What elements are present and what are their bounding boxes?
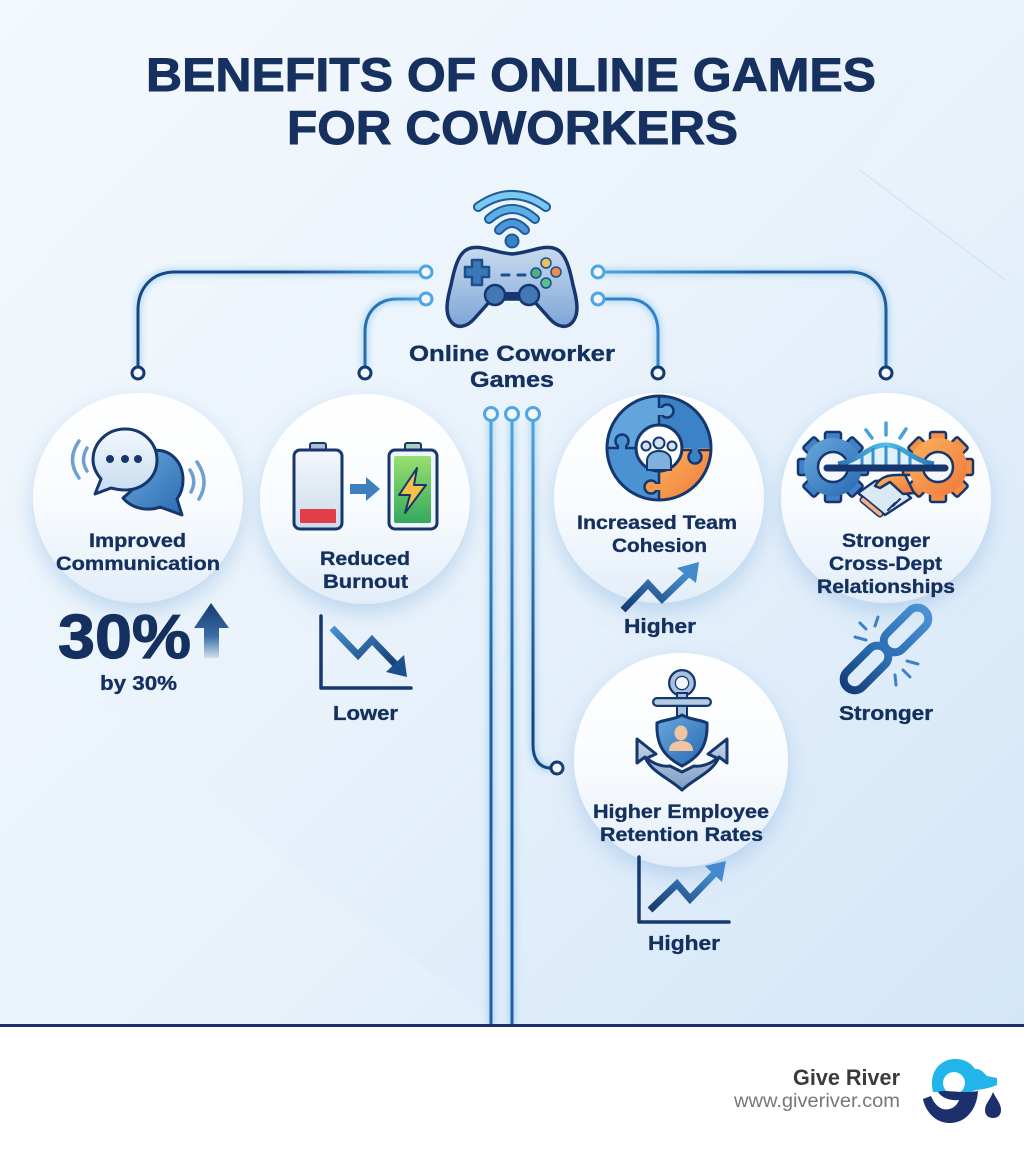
footer brand text: www.giveriver.com <box>733 1091 900 1112</box>
label <box>593 801 769 846</box>
circle background <box>33 393 243 603</box>
central label: Online Coworker <box>409 341 615 366</box>
panel: stronger cross-dept relationships <box>781 393 991 725</box>
footer brand text: Give River <box>793 1065 900 1090</box>
icon: speech bubbles <box>72 429 204 515</box>
title: BENEFITS OF ONLINE GAMES <box>146 48 876 101</box>
central label: Games <box>470 367 554 392</box>
label <box>817 530 955 598</box>
central label <box>409 341 615 392</box>
icon: anchor with shield <box>637 673 727 790</box>
label <box>320 548 410 593</box>
icon: gears bridge and handshake <box>798 423 973 515</box>
connector lines <box>138 272 886 1024</box>
chart: rising trend <box>639 857 729 922</box>
icon: puzzle ring with team <box>607 396 711 500</box>
panel: improved communication <box>33 393 243 695</box>
icon: game controller <box>447 247 577 326</box>
label: Communication <box>56 553 220 575</box>
icon: chain link <box>839 603 933 695</box>
connector nodes <box>132 266 892 774</box>
label: Retention Rates <box>600 824 763 846</box>
footer brand text <box>733 1065 900 1112</box>
label: Cohesion <box>612 535 707 557</box>
panel: higher employee retention rates <box>574 653 788 955</box>
stat: 30 percent: 30% <box>58 603 191 672</box>
circle background <box>554 393 764 603</box>
label: Relationships <box>817 576 955 598</box>
title: FOR COWORKERS <box>287 101 738 154</box>
value label: Lower <box>333 703 398 725</box>
title <box>146 48 876 154</box>
chart: rising trend <box>623 562 699 610</box>
label: Improved <box>89 530 186 552</box>
value label: Stronger <box>839 703 933 725</box>
label: Stronger <box>842 530 930 552</box>
icon: wifi signal <box>478 195 546 248</box>
circle background <box>781 393 991 603</box>
panel: reduced burnout <box>260 394 470 725</box>
label: Reduced <box>320 548 410 570</box>
circle background <box>574 653 788 867</box>
label <box>577 512 737 557</box>
value label: Higher <box>648 933 720 955</box>
stat note: by 30% <box>100 673 177 695</box>
value label: Higher <box>624 616 696 638</box>
icon: Give River logo <box>923 1059 1001 1123</box>
label <box>56 530 220 575</box>
footer band <box>0 1024 1024 1154</box>
label: Increased Team <box>577 512 737 534</box>
label: Burnout <box>323 571 409 593</box>
chart: falling trend <box>321 616 411 688</box>
circle background <box>260 394 470 604</box>
label: Cross-Dept <box>829 553 943 575</box>
panel: increased team cohesion <box>554 393 764 638</box>
label: Higher Employee <box>593 801 769 823</box>
icon: up arrow <box>194 603 229 658</box>
icon: batteries <box>294 443 437 529</box>
